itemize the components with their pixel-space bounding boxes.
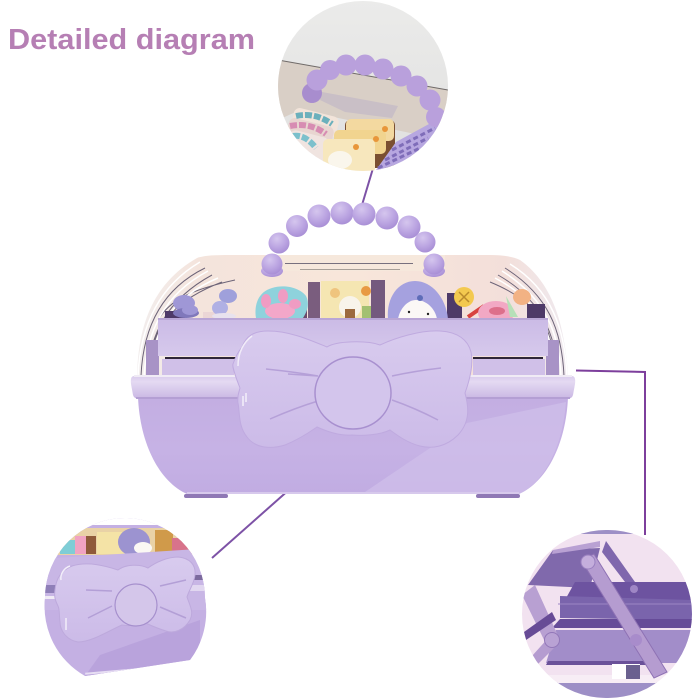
sticker: sheep cards <box>321 281 372 319</box>
stickers inside the lid <box>173 280 531 325</box>
sticker: red candy <box>468 306 484 317</box>
sticker: teal and pink paw <box>256 286 308 319</box>
leader line: interior trays detail <box>576 370 645 535</box>
back tray walls <box>565 582 692 600</box>
sticker: dark divider <box>308 282 320 319</box>
rivet <box>630 585 638 593</box>
middle tray <box>560 596 692 620</box>
left strut <box>524 585 557 640</box>
bow clasp <box>233 331 472 447</box>
sticker: green leaf <box>506 296 518 317</box>
title: Detailed diagram <box>8 24 255 56</box>
bead handle <box>261 202 445 277</box>
side rails <box>40 575 210 599</box>
left joint <box>544 632 560 648</box>
tray background <box>278 60 448 135</box>
printed sticker <box>612 664 640 679</box>
stickers strip <box>58 528 192 555</box>
side glass lower left and right <box>146 340 159 376</box>
top and bottom lavender bands <box>557 530 657 698</box>
upper tray left <box>528 548 600 588</box>
sticker: dark divider right <box>371 280 385 319</box>
sheep sticker cards <box>323 119 395 173</box>
white lower area <box>372 168 378 170</box>
white top of circle <box>93 518 157 525</box>
sticker: peach paw <box>513 289 531 305</box>
lower tray <box>546 630 692 663</box>
sticker: yellow biscuit <box>454 287 474 307</box>
front panel of lid <box>158 320 548 356</box>
streaks under the stickers <box>165 293 545 319</box>
main body <box>138 397 568 494</box>
sticker: pink flower <box>478 301 514 325</box>
upper tray right rear strut <box>602 541 635 582</box>
main product: purple storage box <box>131 202 575 498</box>
inner label plate <box>280 255 445 271</box>
sticker: purple bear <box>173 295 199 318</box>
diagonal handle arm <box>581 554 667 678</box>
joint on handle <box>630 634 642 646</box>
leader line: handle detail <box>362 165 374 205</box>
lower body highlight <box>85 620 200 676</box>
body shadow highlight <box>362 402 566 494</box>
bow centre button <box>315 357 391 429</box>
small bow <box>55 557 195 642</box>
detail circle: interior trays close-up <box>520 528 695 700</box>
leader line: bow detail <box>212 442 343 558</box>
pink and teal sticker cards <box>288 108 338 161</box>
detail circle: bow close-up <box>44 518 206 676</box>
lid panel <box>40 549 210 610</box>
lower lid band <box>162 357 545 375</box>
sticker: white bunny in purple <box>388 281 448 319</box>
white card inside <box>320 92 398 118</box>
beads in close-up <box>302 54 446 127</box>
sticker: purple paw <box>212 289 237 319</box>
feet <box>184 494 520 498</box>
rim <box>131 376 575 399</box>
transparent dome lid <box>135 250 570 380</box>
purple sticker cards <box>376 120 441 170</box>
detail circle: bead handle close-up <box>278 1 448 171</box>
